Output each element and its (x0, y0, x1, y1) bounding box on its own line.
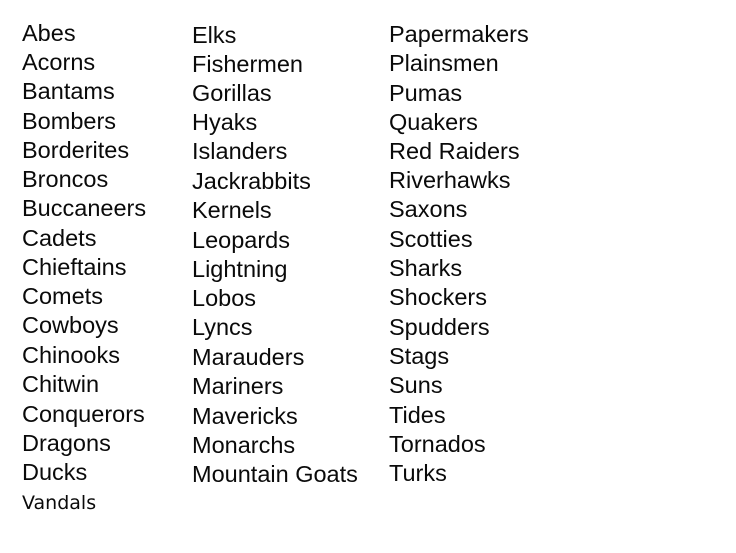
column 3: team names Papermakers to Turks: Pumas (389, 80, 462, 106)
column 1: team names Abes to Vandals: Borderites (22, 137, 129, 163)
column 2: team names Elks to Mountain Goats: Gorillas (192, 80, 272, 106)
column 1: team names Abes to Vandals: Bantams (22, 78, 115, 104)
column 3: team names Papermakers to Turks: Saxons (389, 196, 467, 222)
column 3: team names Papermakers to Turks: Sharks (389, 255, 462, 281)
column 2: team names Elks to Mountain Goats: Lightning (192, 256, 287, 282)
column 2: team names Elks to Mountain Goats: Mavericks (192, 403, 298, 429)
column 1: team names Abes to Vandals: Ducks (22, 459, 87, 485)
column 1: team names Abes to Vandals: Comets (22, 283, 103, 309)
column 1: team names Abes to Vandals: Cowboys (22, 312, 119, 338)
column 1: team names Abes to Vandals: Broncos (22, 166, 108, 192)
column 1: team names Abes to Vandals: Chieftains (22, 254, 126, 280)
column 3: team names Papermakers to Turks (389, 21, 529, 486)
column 2: team names Elks to Mountain Goats: Mariners (192, 373, 283, 399)
column 2: team names Elks to Mountain Goats: Monarchs (192, 432, 295, 458)
column 3: team names Papermakers to Turks: Suns (389, 372, 443, 398)
column 3: team names Papermakers to Turks: Spudders (389, 314, 490, 340)
column 1: team names Abes to Vandals: Vandals (22, 492, 96, 514)
column 1: team names Abes to Vandals: Chinooks (22, 342, 120, 368)
column 1: team names Abes to Vandals: Dragons (22, 430, 111, 456)
column 1: team names Abes to Vandals: Cadets (22, 225, 96, 251)
column 2: team names Elks to Mountain Goats (192, 22, 358, 487)
column 1: team names Abes to Vandals: Chitwin (22, 371, 99, 397)
column 2: team names Elks to Mountain Goats: Jackrabbits (192, 168, 311, 194)
column 3: team names Papermakers to Turks: Stags (389, 343, 449, 369)
column 2: team names Elks to Mountain Goats: Elks (192, 22, 236, 48)
column 2: team names Elks to Mountain Goats: Fishermen (192, 51, 303, 77)
column 2: team names Elks to Mountain Goats: Kernels (192, 197, 272, 223)
column 3: team names Papermakers to Turks: Tides (389, 402, 446, 428)
column 1: team names Abes to Vandals: Acorns (22, 49, 95, 75)
column 3: team names Papermakers to Turks: Quakers (389, 109, 478, 135)
column 3: team names Papermakers to Turks: Red Raiders (389, 138, 520, 164)
column 1: team names Abes to Vandals (22, 20, 146, 514)
column 1: team names Abes to Vandals: Buccaneers (22, 195, 146, 221)
column 3: team names Papermakers to Turks: Scotties (389, 226, 473, 252)
column 3: team names Papermakers to Turks: Tornados (389, 431, 486, 457)
column 2: team names Elks to Mountain Goats: Leopards (192, 227, 290, 253)
column 3: team names Papermakers to Turks: Plainsmen (389, 50, 499, 76)
column 1: team names Abes to Vandals: Bombers (22, 108, 116, 134)
column 2: team names Elks to Mountain Goats: Lobos (192, 285, 256, 311)
column 2: team names Elks to Mountain Goats: Lyncs (192, 314, 253, 340)
column 1: team names Abes to Vandals: Conquerors (22, 401, 145, 427)
column 3: team names Papermakers to Turks: Papermakers (389, 21, 529, 47)
column 3: team names Papermakers to Turks: Shockers (389, 284, 487, 310)
column 3: team names Papermakers to Turks: Riverhawks (389, 167, 510, 193)
column 1: team names Abes to Vandals: Abes (22, 20, 76, 46)
column 2: team names Elks to Mountain Goats: Islanders (192, 138, 287, 164)
column 3: team names Papermakers to Turks: Turks (389, 460, 447, 486)
column 2: team names Elks to Mountain Goats: Marauders (192, 344, 304, 370)
column 2: team names Elks to Mountain Goats: Hyaks (192, 109, 257, 135)
column 2: team names Elks to Mountain Goats: Mountain Goats (192, 461, 358, 487)
